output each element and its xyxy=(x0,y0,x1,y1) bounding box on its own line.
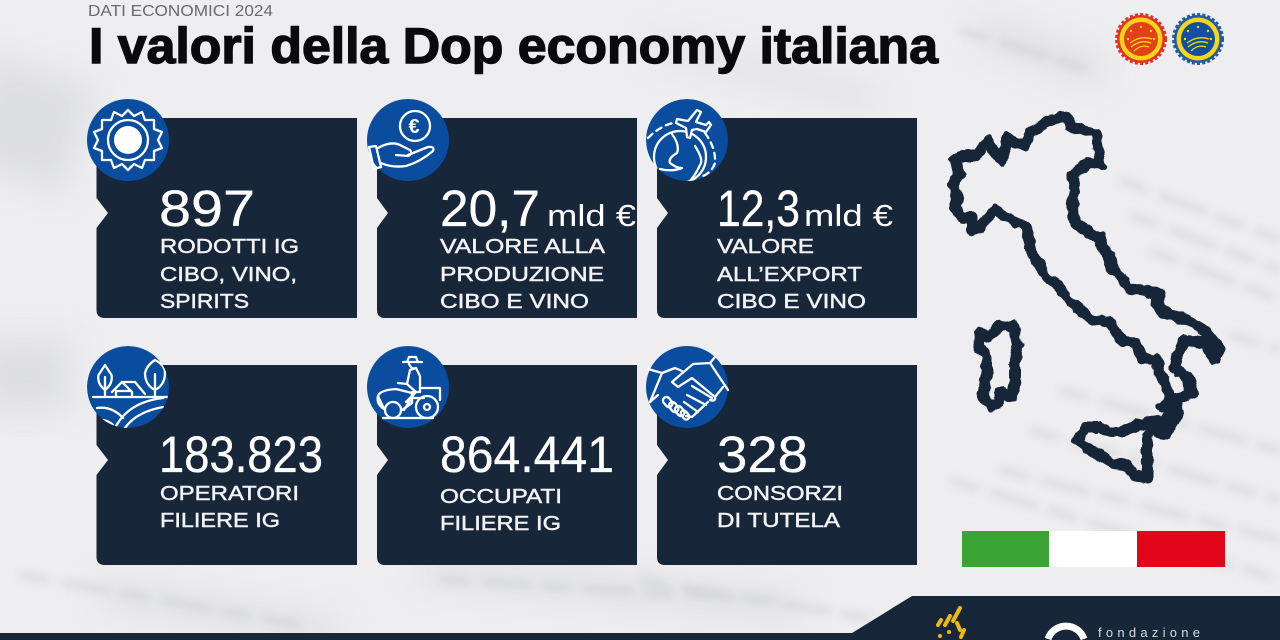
icon: globe and plane xyxy=(646,99,728,183)
stat: 183.823: 183.823 xyxy=(159,426,323,483)
icon: IGP seal xyxy=(1174,14,1222,64)
panel: operatori xyxy=(87,346,357,565)
icon: farmer on tractor xyxy=(367,346,449,428)
eyebrow: dati economici: DATI ECONOMICI 2024 xyxy=(88,3,273,20)
title: I valori della Dop economy italiana xyxy=(89,18,939,74)
stat: 20,7: 20,7 xyxy=(440,180,540,237)
icon: handshake xyxy=(646,346,728,428)
label: cibo, vino: CIBO, VINO, xyxy=(160,263,297,286)
stat: 12,3: 12,3 xyxy=(717,180,800,237)
stat: 328: 328 xyxy=(717,426,808,483)
icon: DOP seal xyxy=(1116,14,1166,64)
logo: white ring xyxy=(1048,626,1084,639)
label: cibo e vino: CIBO E VINO xyxy=(717,290,866,313)
stat: 897: 897 xyxy=(159,180,255,237)
logo text: fondazione: fondazione xyxy=(1098,625,1200,640)
icon: farm landscape xyxy=(87,346,169,428)
footer band xyxy=(0,596,1280,640)
panel: valore alla produzione xyxy=(367,99,637,318)
label: di tutela: DI TUTELA xyxy=(717,509,840,532)
map: Italy outline xyxy=(952,117,1220,478)
label: cibo e vino: CIBO E VINO xyxy=(440,290,589,313)
icon: sun seal xyxy=(87,99,169,181)
logo: yellow dashes xyxy=(938,608,964,637)
panel: prodotti IG xyxy=(87,99,357,318)
unit: mld euro: mld € xyxy=(547,198,636,233)
unit: mld euro: mld € xyxy=(804,198,893,233)
panel: occupati xyxy=(367,346,637,565)
label: filiere IG: FILIERE IG xyxy=(440,512,561,535)
label: spirits: SPIRITS xyxy=(160,290,249,313)
flag: Italian tricolour xyxy=(962,531,1225,567)
label: filiere IG: FILIERE IG xyxy=(160,509,280,532)
panel: consorzi xyxy=(646,346,917,565)
panel: valore all'export xyxy=(646,99,917,318)
label: consorzi: CONSORZI xyxy=(717,482,843,505)
icon: hand with euro: € xyxy=(408,116,420,138)
label: all'export: ALL’EXPORT xyxy=(717,263,863,286)
stat: 864.441: 864.441 xyxy=(440,426,614,483)
label: occupati: OCCUPATI xyxy=(440,485,562,508)
icon: hand with euro xyxy=(367,99,449,181)
label: valore alla: VALORE ALLA xyxy=(440,235,605,258)
label: valore: VALORE xyxy=(717,235,814,258)
label: produzione: PRODUZIONE xyxy=(440,263,604,286)
label: rodotti IG: RODOTTI IG xyxy=(160,235,299,258)
label: operatori: OPERATORI xyxy=(160,482,299,505)
